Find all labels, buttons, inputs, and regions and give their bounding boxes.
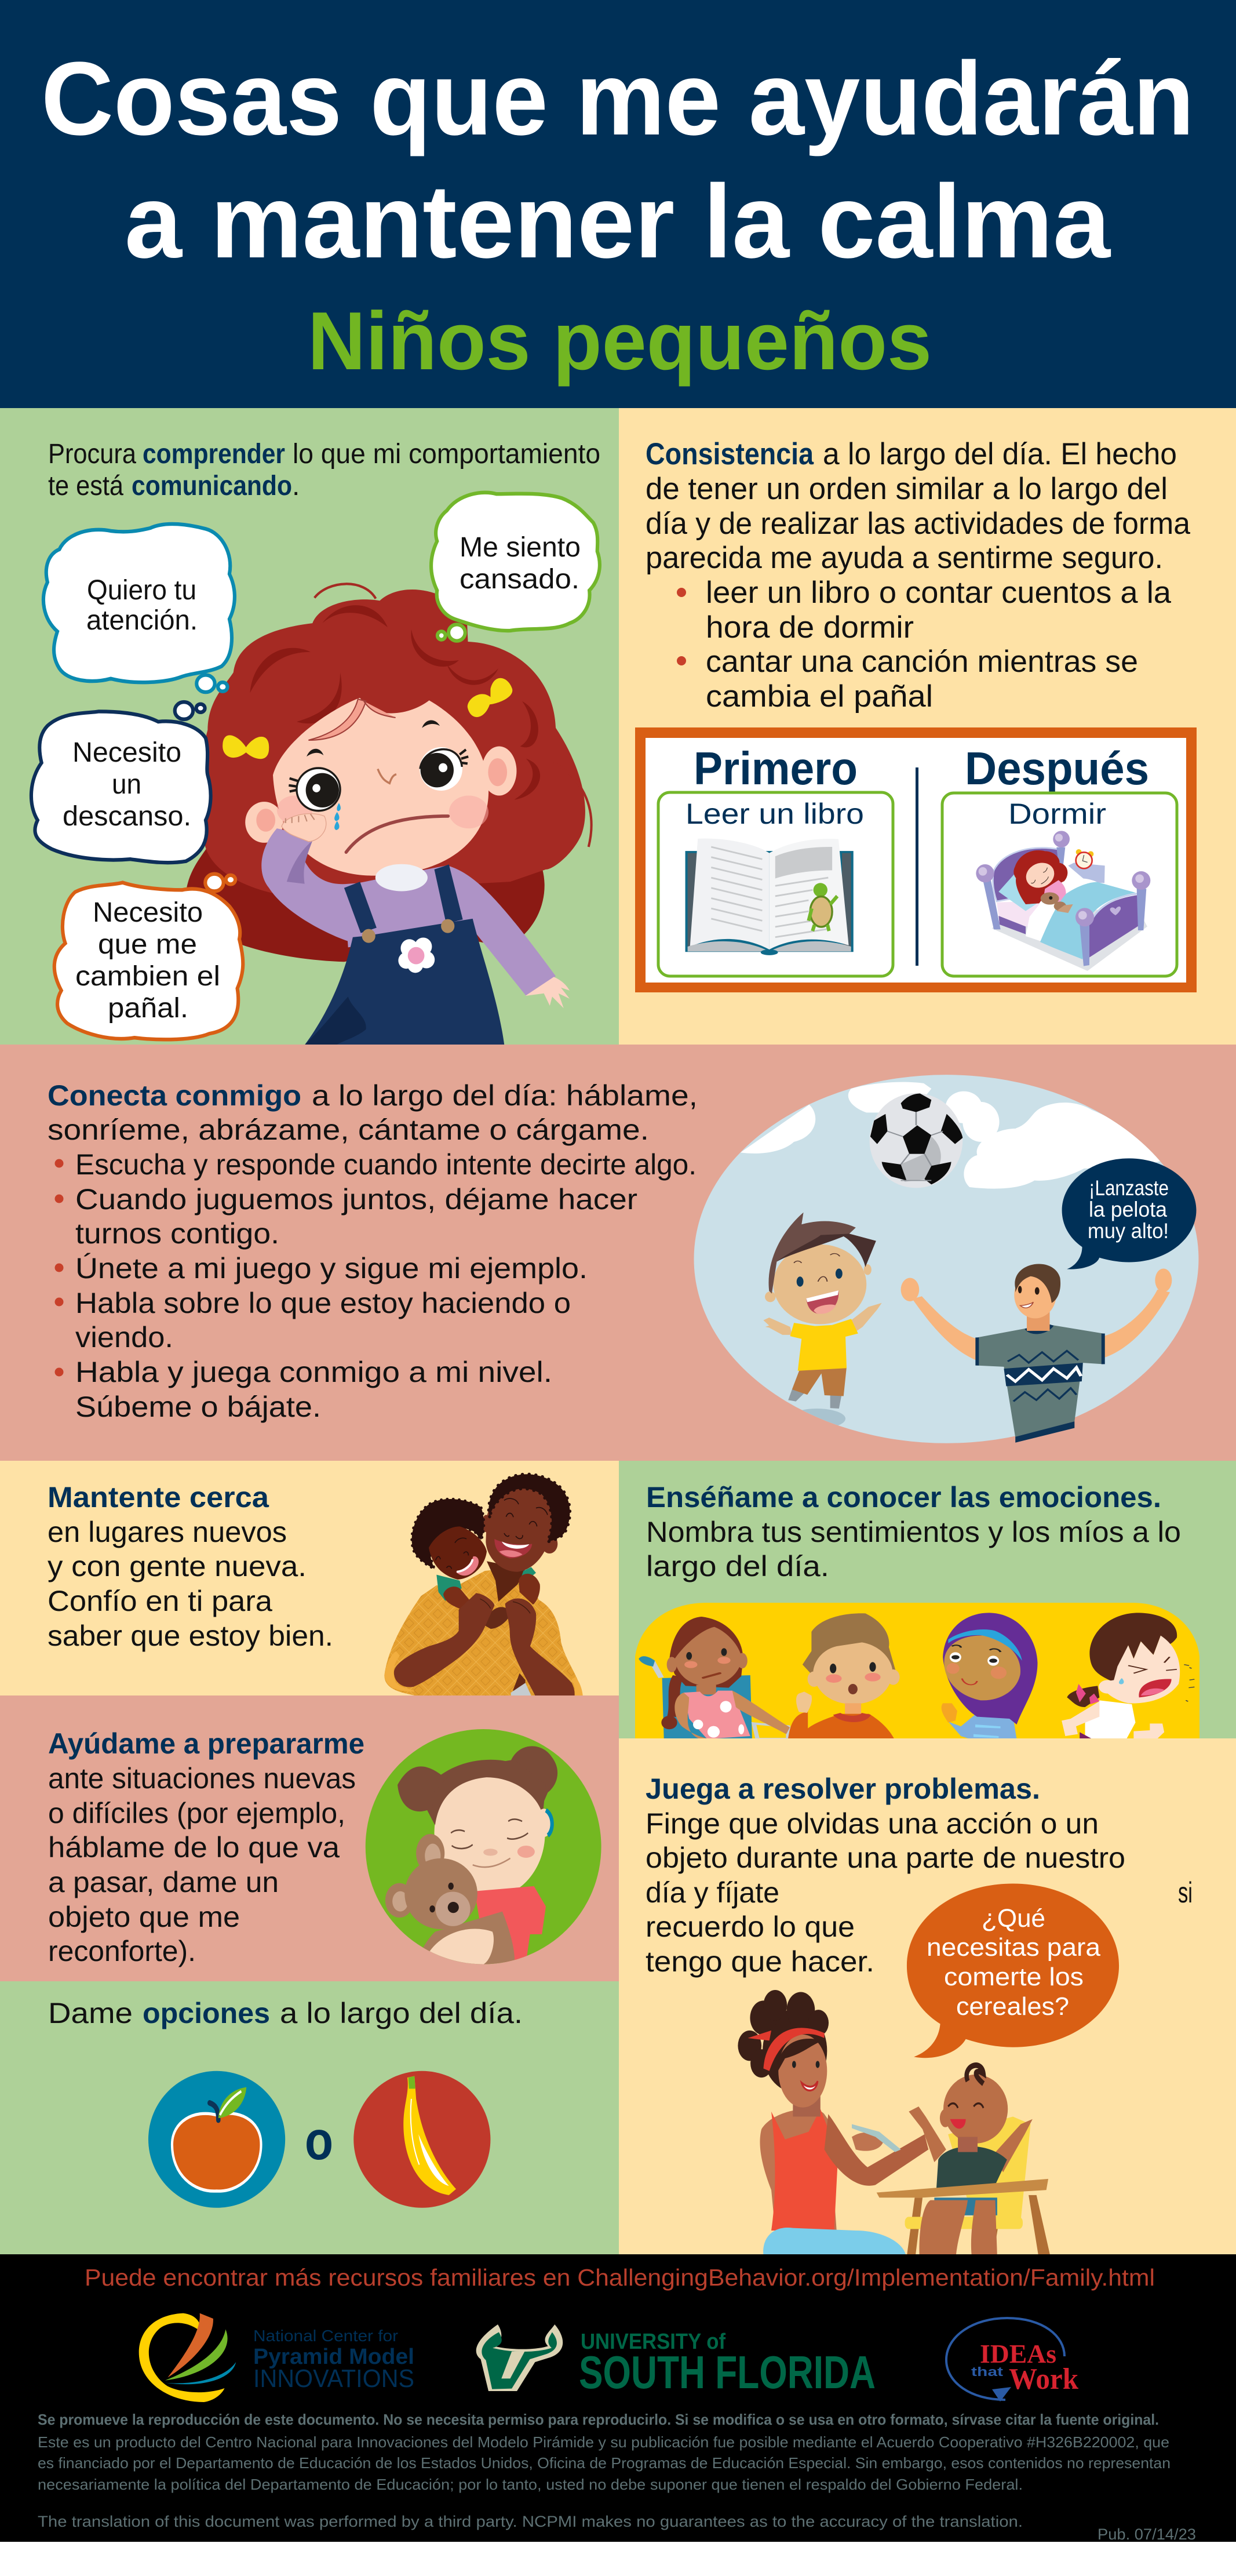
icon: soccer ball [870, 1093, 962, 1188]
illustration: father [901, 1264, 1172, 1443]
ayudame text: háblame de lo que va [48, 1831, 340, 1864]
thought bubble: descanso [31, 702, 211, 863]
conecta text: sonríeme, abrázame, cántame o cárgame. [48, 1114, 649, 1146]
thought bubble: panal [54, 874, 243, 1039]
illustration: mother feeding baby [738, 1990, 1050, 2256]
mantente text: y con gente nueva. [48, 1550, 307, 1582]
consistencia text: parecida me ayuda a sentirme seguro. [646, 541, 1163, 575]
bubble text: descanso: un [112, 769, 141, 800]
ayudame text [48, 1727, 364, 1967]
mantente text: saber que estoy bien. [48, 1620, 333, 1652]
legal text: necesariamente la política del Departamento de Educación; por lo tanto, usted no debe suponer que tienen el respaldo del Gobierno Federal. [38, 2476, 1023, 2493]
footer [0, 2254, 1236, 2543]
ayudame text: reconforte). [48, 1935, 196, 1967]
icon: child sleeping in bed [976, 831, 1150, 971]
juega text: Finge que olvidas una acción o un [646, 1807, 1099, 1840]
baby [877, 2065, 1048, 2256]
speech text: lanzaste: la pelota [1089, 1198, 1167, 1221]
bubble text: descanso: Necesito [72, 737, 181, 768]
conecta text: Cuando juguemos juntos, déjame hacer [75, 1183, 637, 1216]
mantente text: en lugares nuevos [48, 1516, 287, 1548]
panel: consistencia [619, 408, 1236, 1045]
intro text: te está [48, 471, 123, 501]
consistencia text: de tener un orden similar a lo largo del [646, 472, 1168, 506]
child: surprised boy [788, 1613, 900, 1739]
panel: comprender [0, 408, 619, 1045]
juega text: día y fíjate [646, 1876, 779, 1909]
logo: ideas that work: that [971, 2364, 1004, 2379]
legal text [38, 2411, 1171, 2493]
logo: pyramid model innovations: INNOVATIONS [253, 2364, 414, 2393]
speech text: cereales: cereales? [956, 1992, 1069, 2021]
translation note: The translation of this document was performed by a third party. NCPMI makes no guarantees as to the accuracy of the translation. [38, 2513, 1023, 2530]
logo: university of south florida [476, 2324, 876, 2398]
bubble text: atencion [86, 575, 198, 636]
logo: pyramid model innovations [139, 2313, 414, 2402]
speech bubble: lanzaste [1062, 1158, 1196, 1269]
legal text: Este es un producto del Centro Nacional para Innovaciones del Modelo Pirámide y su publicación fue posible mediante el Acuerdo Cooperativo #H326B220002, que [38, 2433, 1169, 2451]
bubble text: descanso: descanso. [63, 801, 191, 832]
intro text: . [292, 471, 300, 501]
ayudame text: ante situaciones nuevas [48, 1762, 356, 1795]
legal text: es financiado por el Departamento de Educación de los Estados Unidos, Oficina de Programas de Educación Especial. Sin embargo, esos contenidos no representan [38, 2454, 1171, 2472]
intro text [48, 439, 600, 501]
consistencia text: Consistencia [646, 437, 814, 471]
mantente text: Mantente cerca [48, 1481, 269, 1513]
juega text [646, 1773, 1193, 1978]
heading: primero: Primero [694, 743, 858, 794]
publication date: Pub. 07/14/23 [1098, 2526, 1196, 2543]
illustration: four children faces [635, 1603, 1199, 1739]
icon: open book [686, 839, 854, 955]
ayudame text: o difíciles (por ejemplo, [48, 1797, 345, 1829]
logo: pyramid model innovations: National Center for [253, 2327, 398, 2345]
speech bubble: cereales [907, 1884, 1119, 2058]
speech text: lanzaste: muy alto! [1088, 1219, 1169, 1243]
conecta text [48, 1079, 698, 1423]
logo: ideas that work: IDEAs [980, 2339, 1056, 2368]
label: dormir: Dormir [1008, 798, 1106, 830]
emociones text [646, 1481, 1181, 1582]
opciones text [48, 1997, 523, 2029]
thought bubble: atencion [43, 524, 235, 692]
consistencia text: a lo largo del día. El hecho [823, 437, 1177, 471]
intro text: comunicando [132, 471, 292, 501]
panel: mantente cerca [0, 1461, 619, 1695]
juega text: objeto durante una parte de nuestro [646, 1842, 1125, 1874]
panel: opciones [0, 1981, 619, 2255]
bubble text: cansado [460, 532, 581, 595]
logo: pyramid model innovations: Pyramid Model [253, 2345, 414, 2369]
speech text: lanzaste [1088, 1176, 1169, 1243]
logo: ideas that work: Work [1009, 2363, 1078, 2396]
heading: despues: Después [965, 743, 1149, 794]
bubble text: panal [75, 897, 220, 1024]
consistencia text: leer un libro o contar cuentos a la [706, 576, 1172, 610]
resources link: Puede encontrar más recursos familiares en ChallengingBehavior.org/Implementation/Family.html [85, 2264, 1155, 2291]
juega text: recuerdo lo que [646, 1911, 855, 1943]
mother's arm and spoon [825, 2114, 928, 2186]
ayudame text: Ayúdame a prepararme [48, 1727, 364, 1760]
label: leer un libro: Leer un libro [686, 798, 864, 830]
bubble text: atencion: atención. [86, 605, 198, 636]
intro text: Procura [48, 439, 136, 470]
conecta text: Súbeme o bájate. [75, 1391, 321, 1423]
juega text: si [1178, 1876, 1193, 1909]
opciones text: a lo largo del día. [280, 1997, 523, 2029]
panel: juega a resolver problemas [619, 1738, 1236, 2256]
intro text: comprender [143, 439, 285, 470]
speech text: cereales: necesitas para [927, 1933, 1101, 1962]
icon: apple [148, 2071, 285, 2208]
icon: banana [353, 2071, 490, 2208]
legal text: Se promueve la reproducción de este documento. No se necesita permiso para reproducirlo. Si se modifica o se usa en otro formato, sírvase citar la fuente original. [38, 2411, 1159, 2428]
header banner [0, 0, 1236, 408]
bubble text: descanso [63, 737, 191, 832]
consistencia text [646, 437, 1190, 714]
logo: ideas that work [946, 2318, 1078, 2408]
bubble text: cansado: cansado. [460, 564, 579, 595]
first-then board [635, 727, 1197, 992]
title: Cosas que me ayudarán [41, 41, 1194, 157]
logo: university of south florida: UNIVERSITY of [581, 2330, 725, 2354]
conecta text: a lo largo del día: háblame, [312, 1079, 698, 1112]
child: girl in hijab [942, 1613, 1038, 1739]
opciones text: opciones [143, 1997, 270, 2029]
intro text: lo que mi comportamiento [293, 439, 600, 470]
conecta text: Conecta conmigo [48, 1079, 301, 1112]
consistencia text: cambia el pañal [706, 679, 933, 714]
bubble text: panal: Necesito [93, 897, 203, 928]
emociones text: Enséñame a conocer las emociones. [646, 1481, 1161, 1513]
speech text: cereales: ¿Qué [982, 1904, 1045, 1933]
panel: emociones [619, 1461, 1236, 1739]
illustration: father and child hug [384, 1474, 583, 1695]
title [41, 41, 1194, 280]
logo: university of south florida: SOUTH FLORIDA [579, 2346, 876, 2398]
panel: conecta conmigo [0, 1045, 1236, 1461]
bubble text: atencion: Quiero tu [87, 575, 196, 606]
high chair [905, 2116, 1050, 2256]
child: girl in wheelchair [639, 1617, 790, 1739]
ayudame text: a pasar, dame un [48, 1866, 279, 1898]
mantente text: Confío en ti para [48, 1585, 272, 1617]
juega text: Juega a resolver problemas. [646, 1773, 1040, 1805]
bubble text: panal: que me [98, 929, 197, 960]
consistencia text: día y de realizar las actividades de forma [646, 507, 1190, 541]
speech text: cereales [927, 1904, 1101, 2021]
conecta text: viendo. [75, 1321, 173, 1354]
conecta text: Escucha y responde cuando intente decirte algo. [75, 1148, 697, 1181]
emociones text: Nombra tus sentimientos y los míos a lo [646, 1516, 1181, 1548]
child: crying angry girl [1062, 1613, 1194, 1739]
emociones text: largo del día. [646, 1550, 829, 1582]
illustration: crying girl [31, 493, 600, 1045]
consistencia text: cantar una canción mientras se [706, 645, 1138, 679]
ayudame text: objeto que me [48, 1901, 240, 1933]
juega text: tengo que hacer. [646, 1945, 874, 1978]
conecta text: Habla y juega conmigo a mi nivel. [75, 1356, 552, 1388]
illustration: father and son playing ball [694, 1075, 1198, 1443]
title: a mantener la calma [125, 163, 1111, 280]
illustration: boy [763, 1213, 882, 1409]
bubble text: panal: pañal. [108, 993, 188, 1024]
bubble text: cansado: Me siento [460, 532, 581, 563]
conecta text: Únete a mi juego y sigue mi ejemplo. [75, 1252, 588, 1285]
illustration: girl hugging teddy bear [366, 1729, 601, 1967]
mantente text [48, 1481, 333, 1652]
opciones text: Dame [48, 1997, 133, 2029]
panel: ayudame a prepararme [0, 1695, 619, 1981]
subtitle: Niños pequeños [308, 295, 932, 387]
speech text: cereales: comerte los [944, 1963, 1084, 1991]
choice word: o: o [305, 2110, 333, 2171]
bubble text: panal: cambien el [75, 961, 220, 992]
consistencia text: hora de dormir [706, 610, 914, 645]
conecta text: Habla sobre lo que estoy haciendo o [75, 1287, 571, 1319]
thought bubble: cansado [431, 493, 600, 641]
conecta text: turnos contigo. [75, 1217, 279, 1250]
speech text: lanzaste: ¡Lanzaste [1089, 1176, 1169, 1200]
